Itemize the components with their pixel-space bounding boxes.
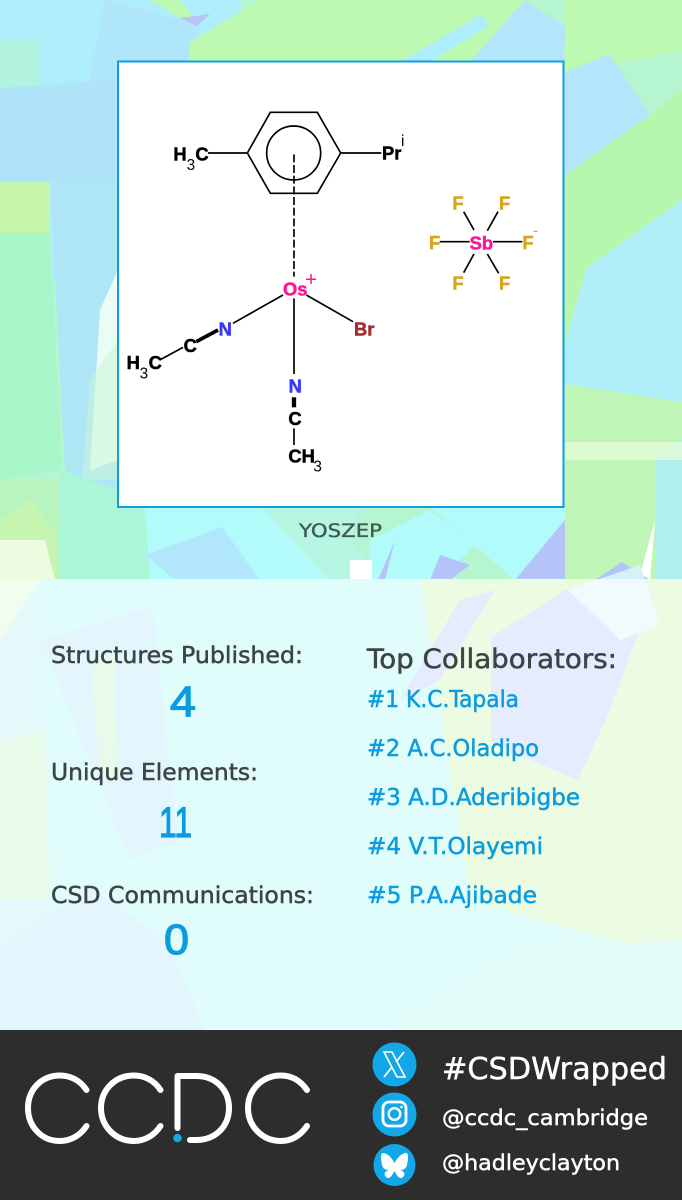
CCDC logo bbox=[28, 1076, 307, 1142]
hashtag: #CSDWrapped bbox=[442, 1052, 667, 1087]
osmium centre and bromide: Os bbox=[283, 278, 307, 299]
lower acetonitrile ligand: C bbox=[288, 408, 302, 429]
handle: hadleyclayton: @hadleyclayton bbox=[442, 1151, 620, 1176]
left acetonitrile ligand bbox=[127, 318, 232, 382]
stat: CSD communications: 0 bbox=[164, 916, 189, 964]
structure refcode caption: YOSZEP bbox=[298, 520, 382, 542]
stat: structures published: Structures Published: bbox=[51, 643, 303, 669]
osmium centre and bromide bbox=[233, 268, 374, 374]
hexafluoroantimonate anion: F bbox=[452, 192, 464, 213]
collaborator 3: #3 A.D.Aderibigbe bbox=[367, 783, 580, 811]
left acetonitrile ligand: C bbox=[149, 352, 162, 373]
stat: structures published bbox=[51, 643, 303, 726]
collaborator 1: #1 K.C.Tapala bbox=[367, 685, 519, 713]
left acetonitrile ligand: 3 bbox=[140, 365, 148, 382]
arene ring with substituents: 3 bbox=[187, 157, 195, 174]
handle: ccdc_cambridge: @ccdc_cambridge bbox=[442, 1106, 648, 1131]
panel: molecule diagram frame bbox=[118, 62, 564, 507]
footer bar bbox=[0, 1030, 682, 1200]
stat: unique elements: Unique Elements: bbox=[51, 760, 258, 786]
collaborator 4: #4 V.T.Olayemi bbox=[367, 832, 543, 860]
heading: top collaborators: Top Collaborators: bbox=[366, 644, 617, 675]
arene ring with substituents: C bbox=[195, 144, 209, 165]
hexafluoroantimonate anion: F bbox=[499, 272, 510, 293]
hexafluoroantimonate anion bbox=[429, 192, 538, 293]
hexafluoroantimonate anion: Sb bbox=[470, 232, 493, 253]
hexafluoroantimonate anion: - bbox=[533, 223, 538, 240]
hexafluoroantimonate anion: F bbox=[452, 272, 464, 293]
stat: CSD communications: CSD Communications: bbox=[51, 883, 314, 909]
osmium centre and bromide: + bbox=[305, 268, 317, 291]
icon: X bbox=[372, 1042, 416, 1086]
collaborator 2: #2 A.C.Oladipo bbox=[367, 734, 539, 762]
arene ring with substituents: i bbox=[401, 133, 404, 150]
hexafluoroantimonate anion: F bbox=[499, 192, 510, 213]
left acetonitrile ligand: C bbox=[184, 335, 197, 356]
stat: unique elements: 11 bbox=[159, 799, 192, 847]
arene ring with substituents: Pr bbox=[382, 143, 401, 164]
left acetonitrile ligand: H bbox=[127, 352, 140, 373]
white translucent overlay panel bbox=[0, 579, 682, 1030]
arene ring with substituents bbox=[173, 112, 404, 277]
icon: Bluesky butterfly bbox=[374, 1144, 416, 1186]
left acetonitrile ligand: N bbox=[219, 318, 232, 339]
molecular structure diagram bbox=[127, 112, 538, 476]
osmium centre and bromide: Br bbox=[354, 318, 374, 339]
lower acetonitrile ligand: N bbox=[289, 375, 302, 396]
icon: Instagram bbox=[372, 1092, 416, 1136]
hexafluoroantimonate anion: F bbox=[522, 232, 534, 253]
arene ring with substituents: H bbox=[173, 144, 187, 165]
stat: structures published: 4 bbox=[170, 678, 196, 726]
collaborator 5: #5 P.A.Ajibade bbox=[367, 881, 537, 909]
stat: unique elements bbox=[51, 760, 258, 847]
hexafluoroantimonate anion: F bbox=[429, 232, 440, 253]
lower acetonitrile ligand: CH bbox=[288, 446, 315, 467]
continues under translucent panel bbox=[0, 579, 682, 1030]
lower acetonitrile ligand bbox=[288, 375, 322, 476]
lower acetonitrile ligand: 3 bbox=[313, 459, 322, 476]
stat: CSD communications bbox=[51, 883, 314, 964]
top collaborators list bbox=[366, 644, 617, 909]
